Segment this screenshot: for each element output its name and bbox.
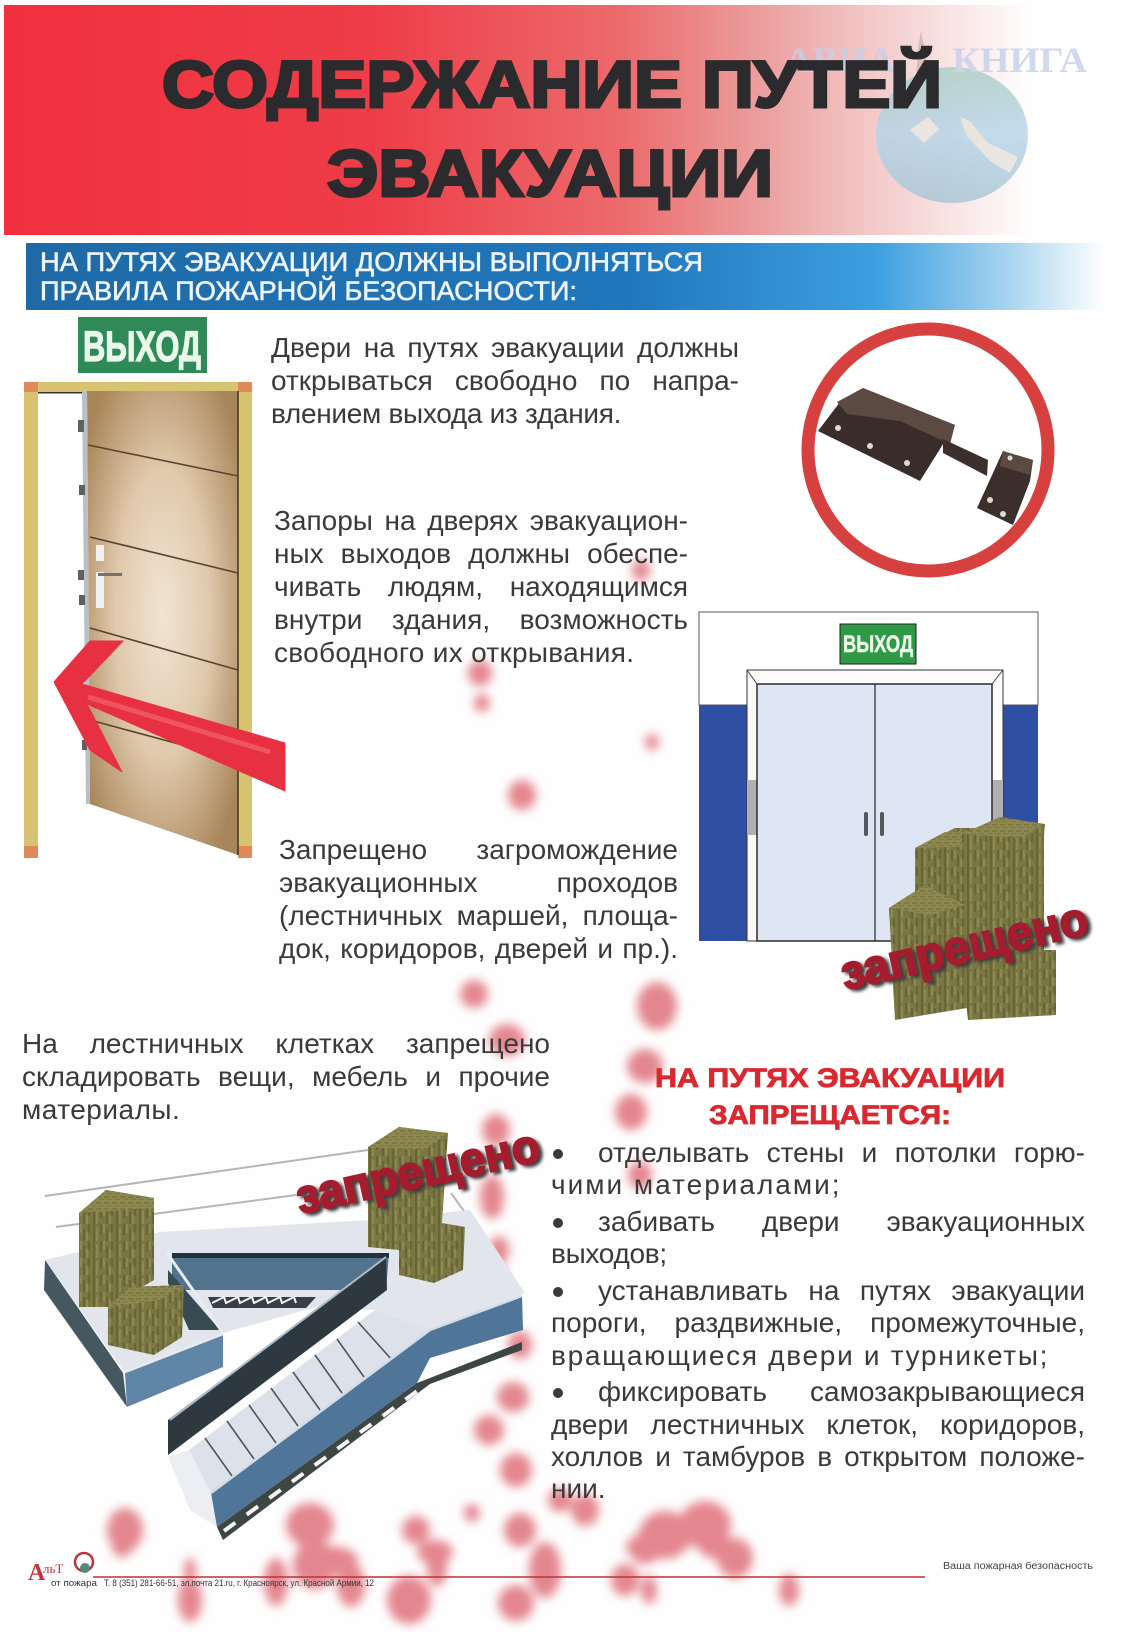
list: prohibited actions: забивать двери эвакуационных [598, 1206, 1085, 1237]
text: doors open freely [271, 332, 739, 429]
footer logo: А [28, 1560, 46, 1586]
list: prohibited actions: устанавливать на путях эвакуации [598, 1275, 1085, 1306]
small exit sign [840, 624, 916, 664]
text: storage on stairwells: материалы. [22, 1094, 180, 1125]
illustration: blocked double exit doors [699, 612, 1056, 1020]
text: locks on exit doors: ных выходов должны обеспе- [274, 538, 688, 569]
footer [28, 1553, 1093, 1588]
illustration: door bolt in red ring [808, 329, 1048, 571]
label: запрещено on doors: запрещено [836, 892, 1093, 1001]
footer logo: льТ [43, 1561, 63, 1576]
text: blocking passages prohibited [279, 834, 678, 964]
label: запрещено on stairs: запрещено [291, 1119, 545, 1225]
red heading: prohibited on evacuation routes: НА ПУТЯХ ЭВАКУАЦИИ [655, 1063, 1005, 1093]
background blurred red blots [107, 559, 799, 1624]
text: doors open freely: влением выхода из здания. [271, 398, 621, 429]
text: locks on exit doors: Запоры на дверях эвакуацион- [274, 505, 688, 536]
stair flight [189, 1310, 430, 1493]
list: prohibited actions: холлов и тамбуров в открытом положе- [551, 1441, 1085, 1472]
text: blocking passages prohibited: эвакуационных проходов [279, 867, 678, 898]
text: storage on stairwells: складировать вещи, мебель и прочие [22, 1061, 550, 1092]
list: prohibited actions: двери лестничных клеток, коридоров, [551, 1409, 1085, 1440]
text: blocking passages prohibited: (лестничных маршей, площа- [279, 900, 678, 931]
list: prohibited actions: отделывать стены и потолки горю- [598, 1137, 1085, 1168]
subheading band: НА ПУТЯХ ЭВАКУАЦИИ ДОЛЖНЫ ВЫПОЛНЯТЬСЯ [40, 247, 703, 277]
text: locks on exit doors: внутри здания, возможность [274, 604, 688, 635]
text: locks on exit doors: свободного их открывания. [274, 637, 634, 668]
watermark: globe and АВИА КНИГА: КНИГА [952, 40, 1087, 80]
title: ЭВАКУАЦИИ [327, 136, 773, 210]
text: locks on exit doors: чивать людям, находящимся [274, 571, 688, 602]
list: prohibited actions: вращающиеся двери и турникеты; [551, 1340, 1049, 1371]
footer: Т. 8 (351) 281-66-51, эл.почта 21.ru, г. Красноярск, ул. Красной Армии, 12 [104, 1578, 374, 1588]
exit sign above door: ВЫХОД [83, 323, 201, 371]
exit sign above door [78, 317, 207, 373]
footer logo [28, 1553, 93, 1586]
list: prohibited actions [551, 1137, 1085, 1504]
watermark: globe and АВИА КНИГА: АВИА [785, 40, 895, 80]
illustration: open door with red arrow [24, 382, 285, 858]
text: blocking passages prohibited: док, коридоров, дверей и пр.). [279, 933, 678, 964]
illustration: staircase with stored boxes [44, 1127, 525, 1540]
small exit sign: ВЫХОД [843, 631, 913, 658]
list: prohibited actions: фиксировать самозакрывающиеся [598, 1376, 1085, 1407]
footer: Ваша пожарная безопасность [943, 1560, 1093, 1572]
red heading: prohibited on evacuation routes [655, 1063, 1005, 1130]
watermark: globe and АВИА КНИГА [785, 30, 1087, 203]
straw boxes on landing [79, 1127, 465, 1355]
text: storage on stairwells [22, 1028, 550, 1125]
text: storage on stairwells: На лестничных клетках запрещено [22, 1028, 550, 1059]
list: prohibited actions: чими материалами; [551, 1169, 842, 1200]
label: запрещено on stairs: запрещено [294, 1122, 548, 1227]
footer: от пожара [51, 1578, 97, 1588]
subheading band [26, 243, 1116, 310]
text: doors open freely: открываться свободно по напра- [271, 365, 739, 396]
red arrow [54, 641, 285, 791]
list: prohibited actions: нии. [551, 1473, 606, 1504]
text: doors open freely: Двери на путях эвакуации должны [271, 332, 739, 363]
text: blocking passages prohibited: Запрещено загромождение [279, 834, 678, 865]
subheading band: ПРАВИЛА ПОЖАРНОЙ БЕЗОПАСНОСТИ: [40, 275, 577, 306]
straw boxes [889, 817, 1056, 1020]
red heading: prohibited on evacuation routes: ЗАПРЕЩАЕТСЯ: [709, 1100, 951, 1130]
header banner [4, 5, 1123, 235]
title: СОДЕРЖАНИЕ ПУТЕЙ [162, 46, 942, 121]
list: prohibited actions: пороги, раздвижные, промежуточные, [551, 1307, 1085, 1338]
title [162, 46, 942, 210]
label: запрещено on doors: запрещено [839, 895, 1097, 1003]
list: prohibited actions: выходов; [551, 1238, 667, 1269]
text: locks on exit doors [274, 505, 688, 668]
